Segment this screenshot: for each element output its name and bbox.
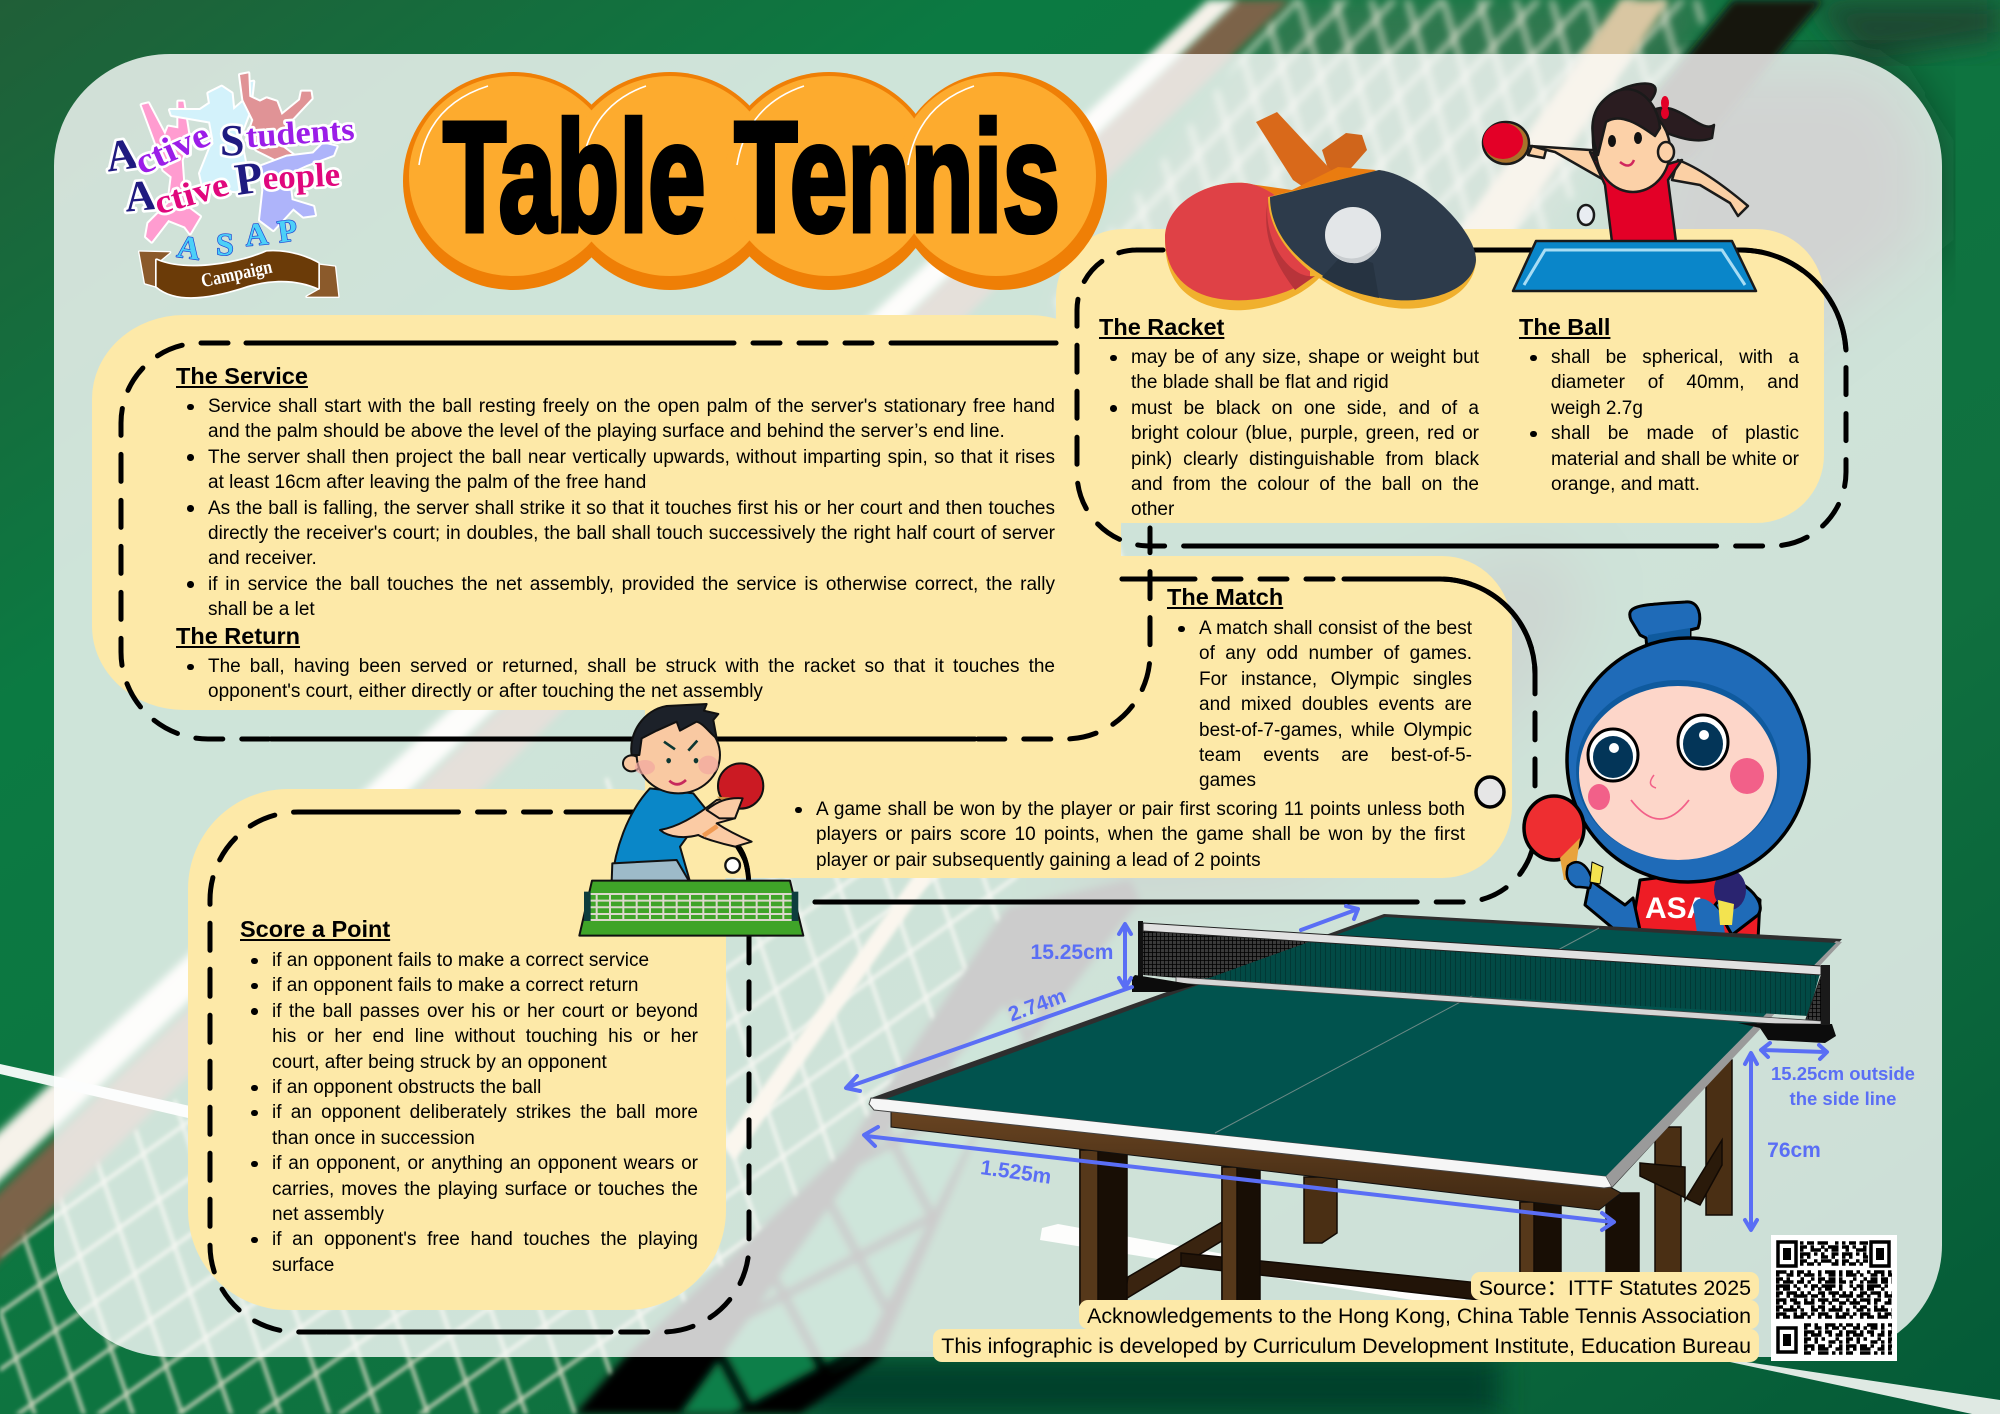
list: service rules: As the ball is falling, the server shall strike it so that it touches first his or her court and then touches directly the receiver's court; in doubles, the ball shall touch successively the right half court of server and receiver. [208, 498, 1055, 569]
table tennis table with net [869, 914, 1842, 1307]
logo: Active Students Active People ASAP Campaign: S [216, 226, 234, 262]
text panel: The Racket [1099, 314, 1479, 520]
arrow: net height [1119, 924, 1131, 988]
list: scoring rules: if an opponent, or anything an opponent wears or carries, moves the playing surface or touches the net assembly [272, 1153, 698, 1225]
logo: Active Students Active People ASAP Campaign: P [232, 152, 266, 205]
heading: Score a Point: Score a Point [240, 916, 390, 942]
labels on the dimensions: 2.74m [1005, 984, 1069, 1026]
icon: boy serving at a green table [579, 704, 803, 936]
source line: Source：ITTF Statutes 2025 [1479, 1276, 1751, 1300]
logo: Active Students Active People ASAP Campaign: ctive [150, 166, 233, 222]
logo: Active Students Active People ASAP Campaign: eople [262, 156, 341, 197]
arrow: table height [1745, 1053, 1757, 1230]
mascot: blue hooded character holding a racket: ASA [1645, 892, 1708, 925]
list: ball rules [1530, 347, 1799, 495]
mascot: blue hooded character holding a racket [1524, 602, 1809, 940]
list: ball rules: shall be made of plastic material and shall be white or orange, and matt. [1551, 423, 1799, 495]
logo: Active Students Active People ASAP Campaign: A [103, 129, 141, 182]
measurement arrows and labels [846, 906, 1827, 1230]
logo: Active Students Active People ASAP Campaign: tudents [245, 112, 356, 155]
labels on the dimensions: 1.525m [979, 1156, 1053, 1189]
labels on the dimensions [979, 941, 1915, 1189]
icon: girl serving at a blue table [1483, 83, 1756, 291]
panel: match background [645, 556, 1512, 878]
text panel: Score a Point [240, 916, 698, 1276]
logo: Active Students Active People ASAP Campaign: P [275, 211, 300, 250]
list: service rules: if in service the ball touches the net assembly, provided the service is otherwise correct, the rally shall be a let [208, 574, 1055, 620]
list: racket rules: must be black on one side, and of a bright colour (blue, purple, green, red or pink) clearly distinguishable from black and from the colour of the ball on the other [1131, 398, 1479, 520]
list: racket rules [1110, 347, 1479, 520]
list: scoring rules: if an opponent obstructs the ball [272, 1077, 541, 1098]
panel: score a point background [188, 789, 726, 1310]
labels on the dimensions: 15.25cm [1031, 941, 1113, 964]
logo: Active Students Active People ASAP Campaign: Campaign [199, 257, 274, 292]
text panel: The Service [176, 363, 1055, 702]
heading: The Racket: The Racket [1099, 314, 1224, 340]
dashed route lines [121, 250, 1846, 1332]
QR code [1771, 1235, 1897, 1361]
list: scoring rules: if the ball passes over his or her court or beyond his or her end line without touching his or her court, after being struck by an opponent [272, 1001, 698, 1073]
icon: crossed table tennis rackets with ball [1165, 112, 1476, 310]
list: scoring rules: if an opponent deliberately strikes the ball more than once in succession [272, 1102, 698, 1149]
logo: Active Students Active People ASAP Campaign: A [175, 228, 203, 267]
heading: The Match: The Match [1167, 584, 1283, 610]
logo: Active Students Active People ASAP Campaign [103, 73, 356, 297]
list: scoring rules [251, 950, 698, 1276]
list: return rule: The ball, having been served or returned, shall be struck with the racket so that it touches the opponent's court, either directly or after touching the net assembly [208, 656, 1055, 702]
list: service rules: The server shall then project the ball near vertically upwards, without imparting spin, so that it rises at least 16cm after leaving the palm of the free hand [208, 447, 1055, 493]
title: orange table tennis balls with the words Table Tennis: Table Tennis [443, 90, 1060, 265]
text panel: The Ball [1519, 314, 1799, 495]
panel: racket and ball background [1056, 229, 1824, 523]
arrow: net outside side line [1761, 1043, 1827, 1059]
list: scoring rules: if an opponent fails to make a correct return [272, 975, 638, 996]
list: scoring rules: if an opponent's free hand touches the playing surface [272, 1229, 698, 1276]
logo: Active Students Active People ASAP Campaign: A [123, 171, 158, 222]
icon: small ball beside the match panel [1476, 777, 1504, 807]
labels on the dimensions: the side line [1790, 1088, 1896, 1109]
arrow: table width near side [846, 987, 1132, 1091]
list: ball rules: shall be spherical, with a diameter of 40mm, and weigh 2.7g [1551, 347, 1799, 419]
developer line: This infographic is developed by Curriculum Development Institute, Education Bureau [941, 1334, 1751, 1358]
logo: Active Students Active People ASAP Campaign: A [243, 215, 270, 253]
list: game rule: A game shall be won by the player or pair first scoring 11 points unless both players or pairs score 10 points, when the game shall be won by the first player or pair subsequently gaining a lead of 2 points [816, 799, 1465, 871]
heading: The Ball: The Ball [1519, 314, 1610, 340]
acknowledgement line: Acknowledgements to the Hong Kong, China Table Tennis Association [1087, 1304, 1751, 1328]
logo: Active Students Active People ASAP Campaign: ctive [129, 114, 216, 182]
labels on the dimensions: 76cm [1767, 1139, 1821, 1162]
labels on the dimensions: 15.25cm outside [1771, 1063, 1915, 1084]
panel: service and return background [92, 315, 1121, 710]
title: orange table tennis balls with the words Table Tennis [403, 72, 1107, 290]
list: match rule: A match shall consist of the best of any odd number of games. For instance, Olympic singles and mixed doubles events are best-of-7-games, while Olympic team events are best-of-5-games [1199, 618, 1472, 791]
list: scoring rules: if an opponent fails to make a correct service [272, 950, 649, 971]
source and acknowledgement notes [933, 1272, 1759, 1362]
heading: The Return: The Return [176, 623, 300, 649]
list: service rules: Service shall start with the ball resting freely on the open palm of the server's stationary free hand and the palm should be above the level of the playing surface and behind the server’s end line. [208, 396, 1055, 442]
list: service rules [187, 396, 1055, 620]
text panel: The Match [795, 584, 1472, 871]
list: racket rules: may be of any size, shape or weight but the blade shall be flat and rigid [1131, 347, 1479, 393]
arrow: table end width [864, 1127, 1614, 1230]
arrow: table width far side [1301, 906, 1358, 930]
logo: Active Students Active People ASAP Campaign: S [220, 116, 244, 165]
heading: The Service: The Service [176, 363, 308, 389]
